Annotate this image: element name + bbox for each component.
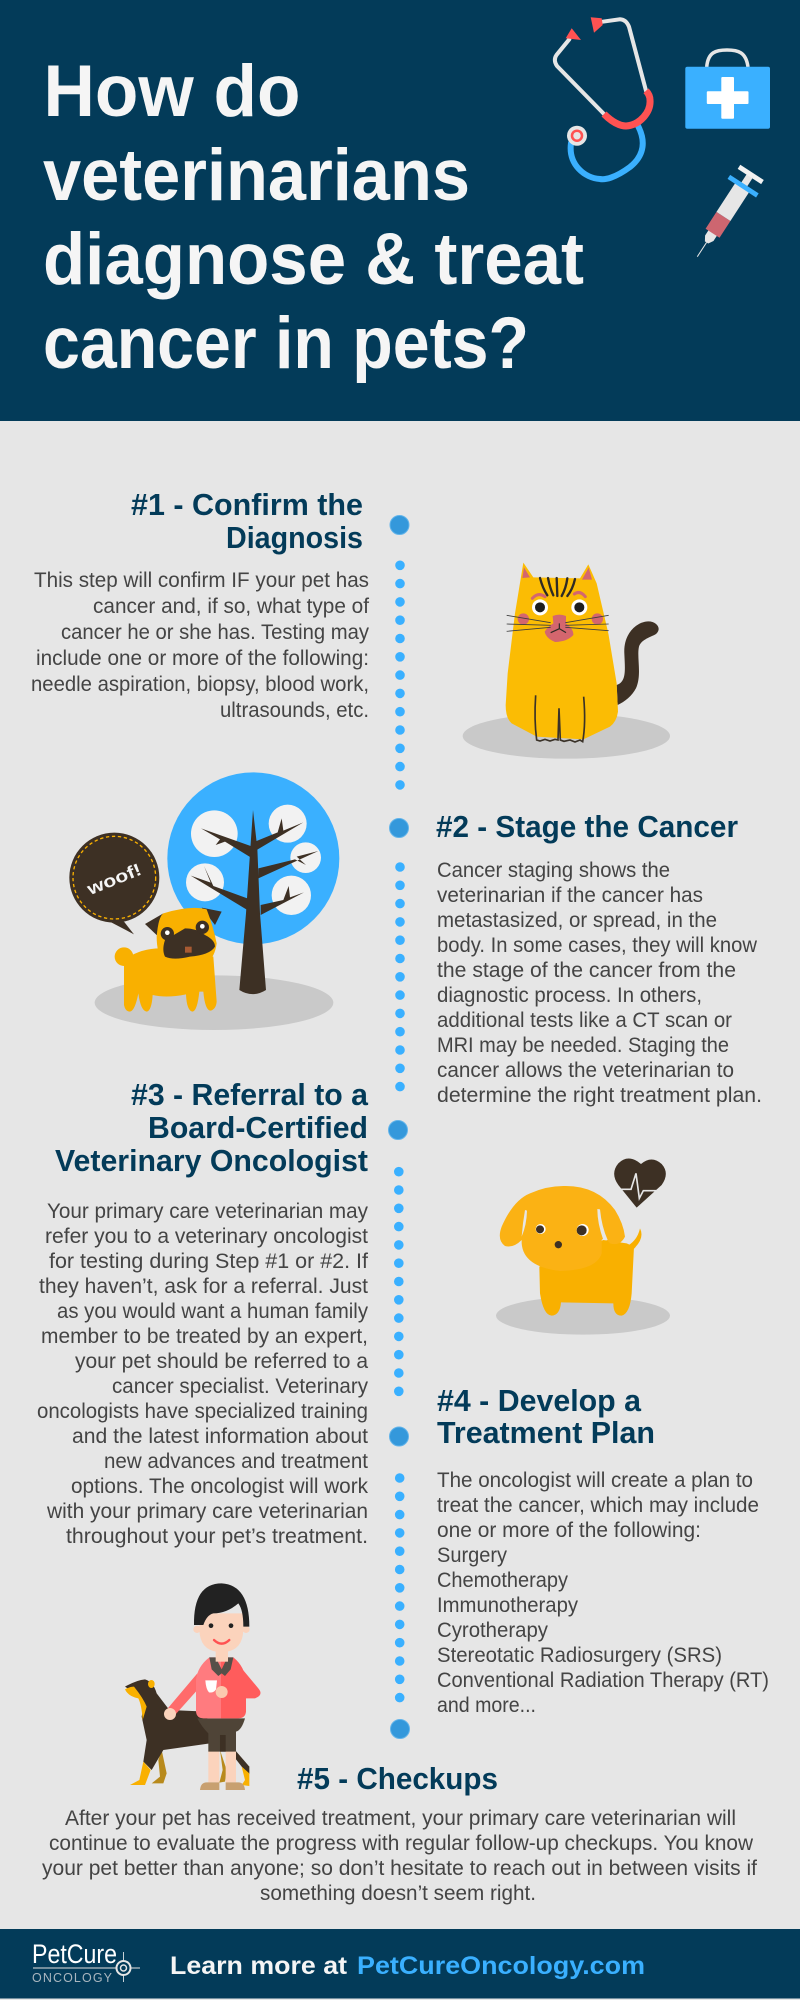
speech bubble [69, 833, 159, 934]
step 1 heading: Diagnosis [226, 521, 363, 555]
step 4 text: one or more of the following: [437, 1519, 701, 1542]
step 1 text: include one or more of the following: [36, 647, 369, 670]
step 3 heading: #3 - Referral to a [131, 1078, 369, 1112]
step 4 text: Stereotatic Radiosurgery (SRS) [437, 1644, 722, 1667]
step 4 text: Conventional Radiation Therapy (RT) [437, 1669, 769, 1692]
step 3 heading: Board-Certified [148, 1111, 368, 1145]
step 3 text: throughout your pet’s treatment. [66, 1525, 368, 1548]
step 1 heading: #1 - Confirm the [131, 488, 363, 522]
step 4 text: treat the cancer, which may include [437, 1494, 759, 1517]
step 4 text: Chemotherapy [437, 1569, 568, 1592]
step 2 text: body. In some cases, they will know [437, 934, 758, 957]
step 5 text [42, 1807, 757, 1905]
step 3 text: they haven’t, ask for a referral. Just [39, 1275, 368, 1298]
step 5 heading: #5 - Checkups [297, 1762, 498, 1796]
illustration: person with dog [125, 1583, 261, 1790]
step 3 text: and the latest information about [72, 1425, 368, 1448]
illustration: cat [463, 563, 670, 759]
step 4 heading: Treatment Plan [437, 1416, 655, 1450]
step 1 text: This step will confirm IF your pet has [34, 569, 369, 592]
step 1 text: cancer he or she has. Testing may [61, 621, 369, 644]
call to action: Learn more at [170, 1952, 348, 1980]
footer band [0, 1929, 800, 1998]
step 3 text: oncologists have specialized training [37, 1400, 368, 1423]
step 4 text: and more... [437, 1694, 536, 1717]
step 4 text: Surgery [437, 1544, 507, 1567]
person [164, 1583, 261, 1790]
title: How do [44, 51, 300, 132]
icon: stethoscope [555, 17, 650, 179]
step 2 heading: #2 - Stage the Cancer [436, 810, 738, 844]
step 3 text: with your primary care veterinarian [46, 1500, 368, 1523]
step 3 text: member to be treated by an expert, [41, 1325, 368, 1348]
illustration: sick dog with heart [496, 1158, 670, 1335]
logo: PetCure Oncology: ONCOLOGY [32, 1971, 113, 1985]
title: veterinarians [43, 135, 470, 216]
step 2 text: metastasized, or spread, in the [437, 909, 717, 932]
step 3 text [37, 1200, 368, 1548]
step 2 text: the stage of the cancer from the [437, 959, 736, 982]
step 3 text: for testing during Step #1 or #2. If [49, 1250, 368, 1273]
step 1 text: cancer and, if so, what type of [93, 595, 369, 618]
step 4 heading: #4 - Develop a [437, 1384, 642, 1418]
illustration: pug and tree [69, 772, 339, 1030]
step 3 text: refer you to a veterinary oncologist [45, 1225, 368, 1248]
step 4 heading [437, 1384, 655, 1450]
header band [0, 0, 800, 421]
step 2 text: Cancer staging shows the [437, 859, 670, 882]
step 1 text: needle aspiration, biopsy, blood work, [31, 673, 369, 696]
step 4 text: The oncologist will create a plan to [437, 1469, 753, 1492]
step 3 text: your pet should be referred to a [75, 1350, 368, 1373]
step 3 heading: Veterinary Oncologist [55, 1144, 368, 1178]
logo: PetCure Oncology [32, 1939, 140, 1985]
step 1 text [31, 569, 369, 722]
title: cancer in pets? [43, 303, 529, 384]
step 3 heading [55, 1078, 369, 1178]
step 1 heading [131, 488, 363, 555]
call to action: PetCureOncology.com [357, 1952, 645, 1980]
step 3 text: options. The oncologist will work [71, 1475, 368, 1498]
step 5 text: After your pet has received treatment, your primary care veterinarian will [65, 1807, 736, 1830]
title: diagnose & treat [43, 219, 584, 300]
icon: heart with pulse [614, 1158, 666, 1208]
step 2 text: veterinarian if the cancer has [437, 884, 703, 907]
icon: medical bag [685, 50, 770, 129]
step 4 text [437, 1469, 769, 1717]
step 1 text: ultrasounds, etc. [220, 699, 369, 722]
step 2 text: MRI may be needed. Staging the [437, 1034, 729, 1057]
step 3 text: new advances and treatment [104, 1450, 368, 1473]
icon: syringe [683, 163, 766, 266]
step 3 text: Your primary care veterinarian may [47, 1200, 368, 1223]
step 2 text: determine the right treatment plan. [437, 1084, 762, 1107]
step 4 text: Immunotherapy [437, 1594, 578, 1617]
speech bubble: woof! [83, 859, 144, 899]
step 5 text: your pet better than anyone; so don’t hesitate to reach out in between visits if [42, 1857, 757, 1880]
step 2 text [437, 859, 762, 1107]
step 5 text: continue to evaluate the progress with regular follow-up checkups. You know [49, 1832, 754, 1855]
step 2 text: additional tests like a CT scan or [437, 1009, 732, 1032]
step 3 text: cancer specialist. Veterinary [112, 1375, 368, 1398]
timeline dots [388, 516, 410, 1738]
step 5 text: something doesn’t seem right. [260, 1882, 536, 1905]
title [43, 51, 584, 384]
step 2 text: diagnostic process. In others, [437, 984, 702, 1007]
step 2 text: cancer allows the veterinarian to [437, 1059, 734, 1082]
step 3 text: as you would want a human family [57, 1300, 368, 1323]
step 4 text: Cyrotherapy [437, 1619, 548, 1642]
logo: PetCure Oncology: PetCure [32, 1939, 117, 1969]
call to action [170, 1952, 645, 1980]
